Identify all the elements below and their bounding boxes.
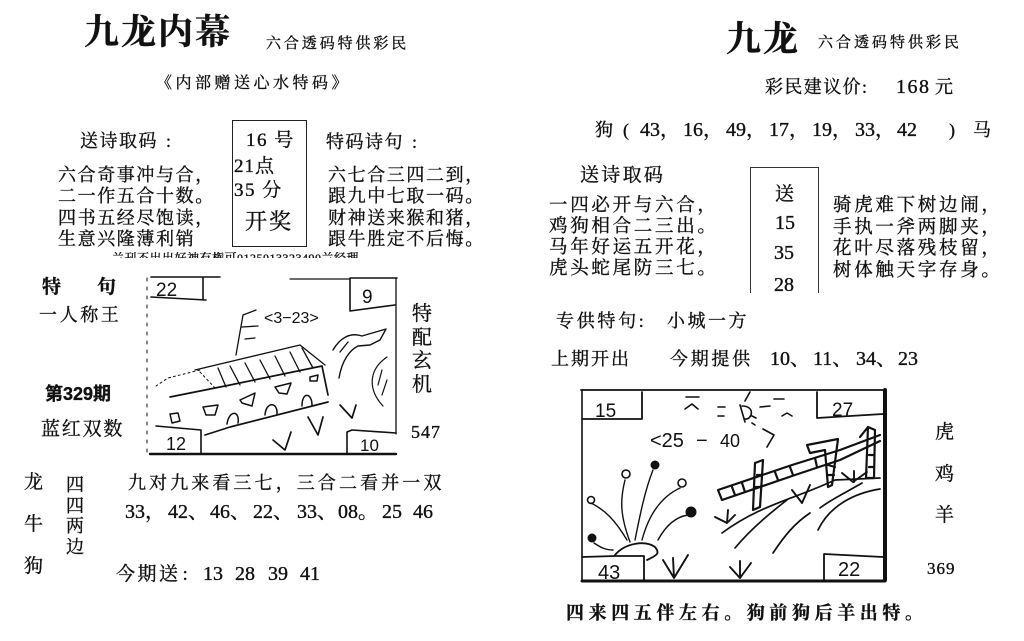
poem: right of left page: 跟牛胜定不后悔。 <box>328 229 485 249</box>
animals: 牛 <box>24 514 43 535</box>
dog numbers: 33， <box>855 119 895 141</box>
gift numbers: : <box>183 564 190 585</box>
blue red even: 蓝红双数 <box>41 419 124 440</box>
numbers <box>125 501 433 523</box>
vertical words: 边 <box>66 536 84 556</box>
numbers: 08。 <box>338 501 378 523</box>
poem: left: 四书五经尽饱读， <box>58 208 215 228</box>
vertical words: 四 <box>66 475 84 495</box>
animals: 狗 <box>24 556 43 577</box>
price: 元 <box>935 77 953 97</box>
corner 9 <box>350 278 397 311</box>
corner 22: 22 <box>156 280 177 301</box>
balloons <box>588 460 696 560</box>
vertical words <box>66 475 84 556</box>
vertical animals right: 羊 <box>935 505 954 526</box>
fence <box>718 427 880 510</box>
poem: right 2: 树体触天字存身。 <box>833 261 1003 281</box>
poem: left: 生意兴隆薄利销 <box>58 229 195 249</box>
poem: left: 二一作五合十数。 <box>58 186 215 206</box>
gift numbers: 今期送 <box>116 564 181 585</box>
vertical animals right: 虎 <box>935 422 954 443</box>
corner 10: 10 <box>360 436 379 455</box>
last period: 今期提供 <box>670 349 753 369</box>
poem: right 1: 马年好运五开花， <box>549 238 719 258</box>
illustration: left house <box>146 276 398 456</box>
poem: right 2 <box>833 194 1003 281</box>
draw label: 开奖 <box>245 209 293 234</box>
dog numbers: 16， <box>683 119 723 141</box>
poem: right 2: 骑虎难下树边闹， <box>833 196 1003 216</box>
numbers: 22、 <box>253 501 293 523</box>
gift numbers: 41 <box>300 563 320 585</box>
last period: 11、 <box>813 348 852 370</box>
subtitle: right: 六合透码特供彩民 <box>818 35 962 51</box>
bottom verse: 四来四五伴左右。狗前狗后羊出特。 <box>566 603 928 623</box>
draw time box <box>232 120 307 247</box>
vertical label: 玄 <box>412 350 432 372</box>
phrase: 一人称王 <box>39 305 121 325</box>
corner 10 <box>347 430 396 455</box>
poem: right 1 <box>549 194 719 279</box>
banner: left: 《内部赠送心水特码》 <box>156 75 351 92</box>
label: special phrase: 特句 <box>42 277 152 298</box>
corner 22: 22 <box>838 559 860 581</box>
minute: 35 分 <box>234 180 283 201</box>
poem: right 1: 鸡狗相合二三出。 <box>549 217 719 237</box>
heading: special poem: 特码诗句 : <box>326 132 419 152</box>
numbers: 46、 <box>210 501 250 523</box>
bird and curve <box>333 329 387 406</box>
poem: left: 六合奇事冲与合， <box>58 165 215 185</box>
grass <box>663 471 867 578</box>
vertical label: 特 <box>412 303 432 325</box>
sun and clouds <box>685 392 792 425</box>
numbers: 33、 <box>297 501 337 523</box>
gift numbers <box>116 563 320 585</box>
animals: 龙 <box>24 472 43 493</box>
vertical animals right: 鸡 <box>935 464 954 484</box>
dog numbers: ( <box>623 120 629 140</box>
numbers: 25 <box>382 501 402 523</box>
poem: right 2: 花叶尽落残枝留， <box>833 239 1003 259</box>
last period: 上期开出 <box>551 349 631 369</box>
poem: right of left page: 六七合三四二到， <box>328 165 485 185</box>
number 35: 35 <box>774 242 794 264</box>
hills <box>722 478 880 553</box>
corner 27: 27 <box>832 400 853 421</box>
number 28: 28 <box>774 274 794 296</box>
corner 22 <box>151 277 220 301</box>
poem: right of left page <box>328 165 485 249</box>
last period: 34、 <box>856 348 896 370</box>
heading: send poem right: 送诗取码 <box>580 165 665 186</box>
price <box>765 76 953 98</box>
hour: 21点 <box>234 156 275 177</box>
gift numbers: 13 <box>203 563 223 585</box>
illustration: right fence <box>580 388 887 584</box>
poem: right 2: 手执一斧两脚夹， <box>833 218 1003 238</box>
corner 12: 12 <box>166 434 186 454</box>
corner 9: 9 <box>362 287 373 308</box>
corner 15: 15 <box>595 401 616 422</box>
frame <box>147 278 396 454</box>
number: 16 hao: 16 号 <box>246 130 295 151</box>
dog numbers: 马 <box>973 120 991 140</box>
corner 15 <box>582 392 642 422</box>
last period: 23 <box>898 348 918 370</box>
corner 43: 43 <box>598 562 620 584</box>
sun and range <box>236 310 319 355</box>
dog numbers: 19， <box>812 119 852 141</box>
dog numbers: 49， <box>726 119 766 141</box>
range label <box>650 429 774 452</box>
poem: right 1: 一四必开与六合， <box>549 196 719 216</box>
frame <box>581 390 885 581</box>
number 547: 547 <box>411 422 441 442</box>
dog numbers: ) <box>949 120 955 140</box>
vertical label: 配 <box>412 326 432 348</box>
subtitle: left: 六合透码特供彩民 <box>266 36 409 52</box>
range label: <25 <box>650 430 684 452</box>
range label: 40 <box>720 431 740 451</box>
corner 43 <box>582 556 644 584</box>
animals <box>24 472 43 577</box>
title: right: 九龙 <box>726 20 800 59</box>
price: 彩民建议价: <box>765 77 868 97</box>
number 15: 15 <box>775 212 795 234</box>
vertical animals right <box>935 422 954 526</box>
last period <box>551 348 918 370</box>
dog numbers: 狗 <box>595 120 613 140</box>
vertical label <box>412 303 432 396</box>
dog numbers: 43， <box>640 119 680 141</box>
numbers: 33， <box>125 501 165 523</box>
corner 22 <box>824 554 883 581</box>
house <box>156 345 328 435</box>
title: left: 九龙内幕 <box>84 13 232 52</box>
dog numbers <box>595 119 991 141</box>
range label: − <box>696 430 708 452</box>
special phrase: 小城一方 <box>667 311 749 331</box>
heading: send poem: 送诗取码 : <box>80 131 173 151</box>
numbers: 46 <box>413 501 433 523</box>
issue: 第329期 <box>45 384 111 404</box>
poem: right of left page: 财神送来猴和猪， <box>328 208 485 228</box>
dog numbers: 17， <box>769 119 809 141</box>
poem: right 1: 虎头蛇尾防三七。 <box>549 259 719 279</box>
poem: right of left page: 跟九中七取一码。 <box>328 186 485 206</box>
poem: left <box>58 165 215 249</box>
verse: 九对九来看三七，三合二看并一双 <box>128 473 444 493</box>
vertical label: 机 <box>412 374 432 396</box>
gift numbers: 28 <box>235 563 255 585</box>
label send: 送 <box>775 184 794 205</box>
grass <box>273 405 356 450</box>
box: send numbers <box>750 167 819 293</box>
gift numbers: 39 <box>268 563 288 585</box>
corner 27 <box>817 392 883 421</box>
corner 12 <box>156 426 201 454</box>
numbers: 42、 <box>168 501 208 523</box>
number 369: 369 <box>927 559 956 578</box>
vertical words: 四 <box>66 496 84 516</box>
price: 168 <box>896 76 930 98</box>
special phrase: 专供特句: <box>556 311 647 331</box>
dog numbers: 42 <box>897 119 917 141</box>
last period: 10、 <box>770 348 810 370</box>
special phrase <box>556 311 749 331</box>
sun and range: <3−23> <box>264 310 319 327</box>
vertical words: 两 <box>66 516 84 536</box>
